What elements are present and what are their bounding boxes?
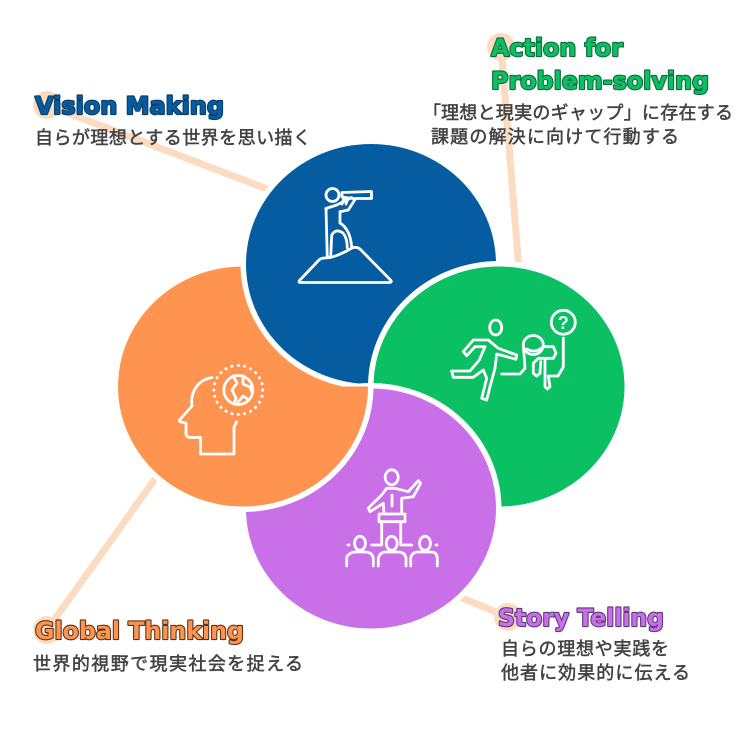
heading: Vision Making <box>35 92 224 120</box>
connector: global <box>33 472 160 644</box>
block: action for problem-solving <box>423 34 733 147</box>
icon: speaker and audience <box>347 470 437 566</box>
icon: runner with question path <box>452 310 575 400</box>
opening bracket: 「 <box>423 103 441 123</box>
connector: vision <box>33 91 275 192</box>
heading: Global Thinking <box>35 617 244 645</box>
circle: purple <box>246 388 496 628</box>
circle: blue <box>246 144 496 384</box>
circle: orange <box>118 266 368 506</box>
heading: Action for <box>491 34 623 62</box>
description second line: 課題の解決に向けて行動する <box>431 127 679 147</box>
connector lines and dots <box>33 33 522 644</box>
circle: orange overlap <box>152 386 374 512</box>
heading: Story Telling <box>498 604 664 632</box>
block: global thinking <box>33 617 303 674</box>
circle: green <box>374 266 624 506</box>
swirl of four circles <box>118 144 624 628</box>
connector: action <box>487 33 519 270</box>
description: 世界的視野で現実社会を捉える <box>33 654 303 674</box>
description: 自らの理想や実践を <box>501 639 669 659</box>
icon: person with telescope on mountain <box>299 188 391 282</box>
icon: head with globe <box>179 366 263 454</box>
icon: question mark: ? <box>558 313 569 333</box>
block: story telling <box>498 604 690 683</box>
infographic <box>33 33 731 681</box>
heading second line: Problem-solving <box>491 67 709 95</box>
block: vision making <box>35 92 311 148</box>
connector: story <box>455 595 522 631</box>
description: 理想と現実のギャップ」に存在する <box>441 103 733 123</box>
description second line: 他者に効果的に伝える <box>501 663 690 683</box>
description: 自らが理想とする世界を思い描く <box>35 128 311 148</box>
